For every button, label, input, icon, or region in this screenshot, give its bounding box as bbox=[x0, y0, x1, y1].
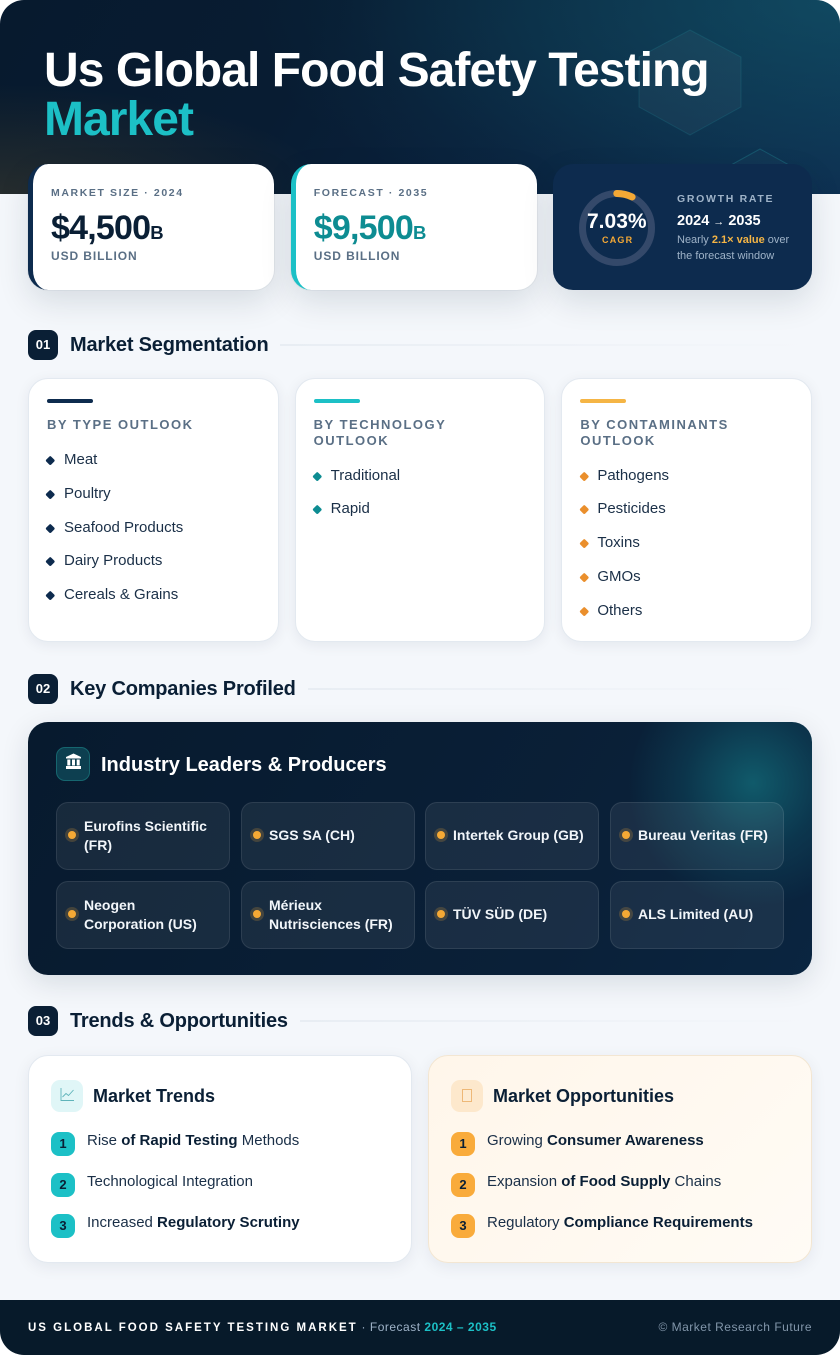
opportunity 2: 2 bbox=[459, 1177, 467, 1192]
company: SGS: SGS SA (CH) bbox=[269, 827, 355, 843]
panel: by type outlook: Meat bbox=[64, 451, 97, 468]
company: Neogen: Corporation (US) bbox=[84, 916, 197, 932]
trend 2: Technological Integration bbox=[87, 1173, 253, 1190]
panel: market trends: Market Trends bbox=[93, 1086, 215, 1106]
company: Eurofins: Eurofins Scientific (FR) bbox=[84, 818, 207, 852]
company: TUV SUD bbox=[425, 881, 599, 949]
section heading: key companies: Key Companies Profiled bbox=[70, 678, 296, 700]
panel: by technology outlook: BY TECHNOLOGY bbox=[314, 417, 446, 432]
stat card: growth rate bbox=[553, 164, 812, 290]
opportunity 3: 3 bbox=[459, 1218, 467, 1233]
panel: by technology outlook bbox=[295, 378, 545, 642]
stat card: market size: $4,500B bbox=[51, 209, 164, 247]
panel: by technology outlook: Rapid bbox=[331, 500, 370, 517]
panel: by type outlook: BY TYPE OUTLOOK bbox=[47, 417, 194, 432]
opportunity 1: 1 bbox=[459, 1136, 467, 1151]
stat card: market size: MARKET SIZE · 2024 bbox=[51, 187, 184, 199]
panel: by contaminants outlook: OUTLOOK bbox=[580, 433, 656, 448]
panel: by contaminants outlook: BY CONTAMINANTS bbox=[580, 417, 729, 432]
icon: bank bbox=[56, 747, 90, 781]
footer: US GLOBAL FOOD SAFETY TESTING MARKET · Forecast 2024 – 2035 bbox=[28, 1320, 497, 1334]
stat card: forecast bbox=[291, 164, 537, 290]
icon: chart bbox=[51, 1080, 83, 1112]
company: ALS: ALS Limited (AU) bbox=[638, 906, 753, 922]
company: Bureau Veritas bbox=[610, 802, 784, 870]
company: Intertek bbox=[425, 802, 599, 870]
company: Intertek: Intertek Group (GB) bbox=[453, 827, 584, 843]
panel: by type outlook: Poultry bbox=[64, 485, 111, 502]
footer bbox=[0, 1300, 840, 1355]
stat card: market size bbox=[28, 164, 274, 290]
section heading: market segmentation: Market Segmentation bbox=[70, 334, 268, 356]
panel: by technology outlook: Traditional bbox=[331, 467, 400, 484]
section heading: trends: 03 bbox=[36, 1013, 50, 1028]
company: Merieux bbox=[241, 881, 415, 949]
panel: industry leaders bbox=[28, 722, 812, 975]
company: SGS bbox=[241, 802, 415, 870]
stat card: growth rate: CAGR bbox=[602, 235, 633, 245]
company: TUV SUD: TÜV SÜD (DE) bbox=[453, 906, 547, 922]
panel: by contaminants outlook: GMOs bbox=[597, 568, 641, 585]
section heading: key companies: 02 bbox=[36, 681, 50, 696]
panel: by contaminants outlook: Pesticides bbox=[597, 500, 666, 517]
trend 3: 3 bbox=[59, 1218, 67, 1233]
panel: by technology outlook: OUTLOOK bbox=[314, 433, 389, 448]
stat card: forecast: FORECAST · 2035 bbox=[314, 187, 428, 199]
panel: by type outlook bbox=[28, 378, 279, 642]
panel: market opportunities bbox=[428, 1055, 812, 1263]
header banner bbox=[0, 0, 840, 194]
opportunity 1 bbox=[451, 1132, 704, 1156]
icon: missing glyph bbox=[451, 1080, 483, 1112]
panel title: Industry Leaders & Producers bbox=[101, 754, 387, 776]
section heading: trends bbox=[28, 1006, 470, 1036]
opportunity 3: Regulatory Compliance Requirements bbox=[487, 1214, 753, 1231]
stat card: forecast: $9,500B bbox=[314, 209, 426, 247]
opportunity 2 bbox=[451, 1173, 721, 1197]
panel: by type outlook: Dairy Products bbox=[64, 552, 162, 569]
trend 2: 2 bbox=[59, 1177, 67, 1192]
company: Neogen bbox=[56, 881, 230, 949]
panel: by type outlook: Seafood Products bbox=[64, 519, 183, 536]
stat card: growth rate: Nearly 2.1× value over bbox=[677, 234, 789, 246]
stat card: growth rate: GROWTH RATE bbox=[677, 193, 774, 205]
title: Us Global Food Safety Testing bbox=[44, 44, 709, 97]
company: Merieux: Mérieux bbox=[269, 896, 322, 912]
trend 1 bbox=[51, 1132, 299, 1156]
panel: by contaminants outlook: Toxins bbox=[597, 534, 640, 551]
trend 2 bbox=[51, 1173, 253, 1197]
panel: market opportunities: Market Opportunities bbox=[493, 1086, 674, 1106]
opportunity 2: Expansion of Food Supply Chains bbox=[487, 1173, 721, 1190]
section heading: market segmentation: 01 bbox=[36, 337, 50, 352]
opportunity 1: Growing Consumer Awareness bbox=[487, 1132, 704, 1149]
panel: by contaminants outlook bbox=[561, 378, 812, 642]
stat card: growth rate: the forecast window bbox=[677, 250, 774, 262]
section heading: key companies bbox=[28, 674, 474, 704]
stat card: growth rate: 2024 → 2035 bbox=[677, 213, 761, 229]
company: Merieux: Nutrisciences (FR) bbox=[269, 916, 393, 932]
panel: market trends bbox=[28, 1055, 412, 1263]
panel: by contaminants outlook: Others bbox=[597, 602, 642, 619]
company: Neogen: Neogen bbox=[84, 896, 135, 912]
panel: by type outlook: Cereals & Grains bbox=[64, 586, 178, 603]
trend 3 bbox=[51, 1214, 300, 1238]
company: Eurofins bbox=[56, 802, 230, 870]
title bbox=[44, 44, 709, 146]
company: ALS bbox=[610, 881, 784, 949]
opportunity 3 bbox=[451, 1214, 753, 1238]
trend 1: Rise of Rapid Testing Methods bbox=[87, 1132, 299, 1149]
panel: by contaminants outlook: Pathogens bbox=[597, 467, 669, 484]
decorative hexagon bbox=[638, 30, 788, 164]
title: Market bbox=[44, 93, 193, 146]
company: Bureau Veritas: Bureau Veritas (FR) bbox=[638, 827, 768, 843]
trend 1: 1 bbox=[59, 1136, 67, 1151]
section heading: market segmentation bbox=[28, 330, 456, 360]
stat card: forecast: USD BILLION bbox=[314, 249, 400, 263]
trend 3: Increased Regulatory Scrutiny bbox=[87, 1214, 300, 1231]
section heading: trends: Trends & Opportunities bbox=[70, 1010, 288, 1032]
CAGR ring bbox=[579, 190, 655, 266]
stat card: market size: USD BILLION bbox=[51, 249, 138, 263]
stat card: growth rate: 7.03% bbox=[587, 210, 647, 233]
footer: © Market Research Future bbox=[658, 1320, 812, 1334]
